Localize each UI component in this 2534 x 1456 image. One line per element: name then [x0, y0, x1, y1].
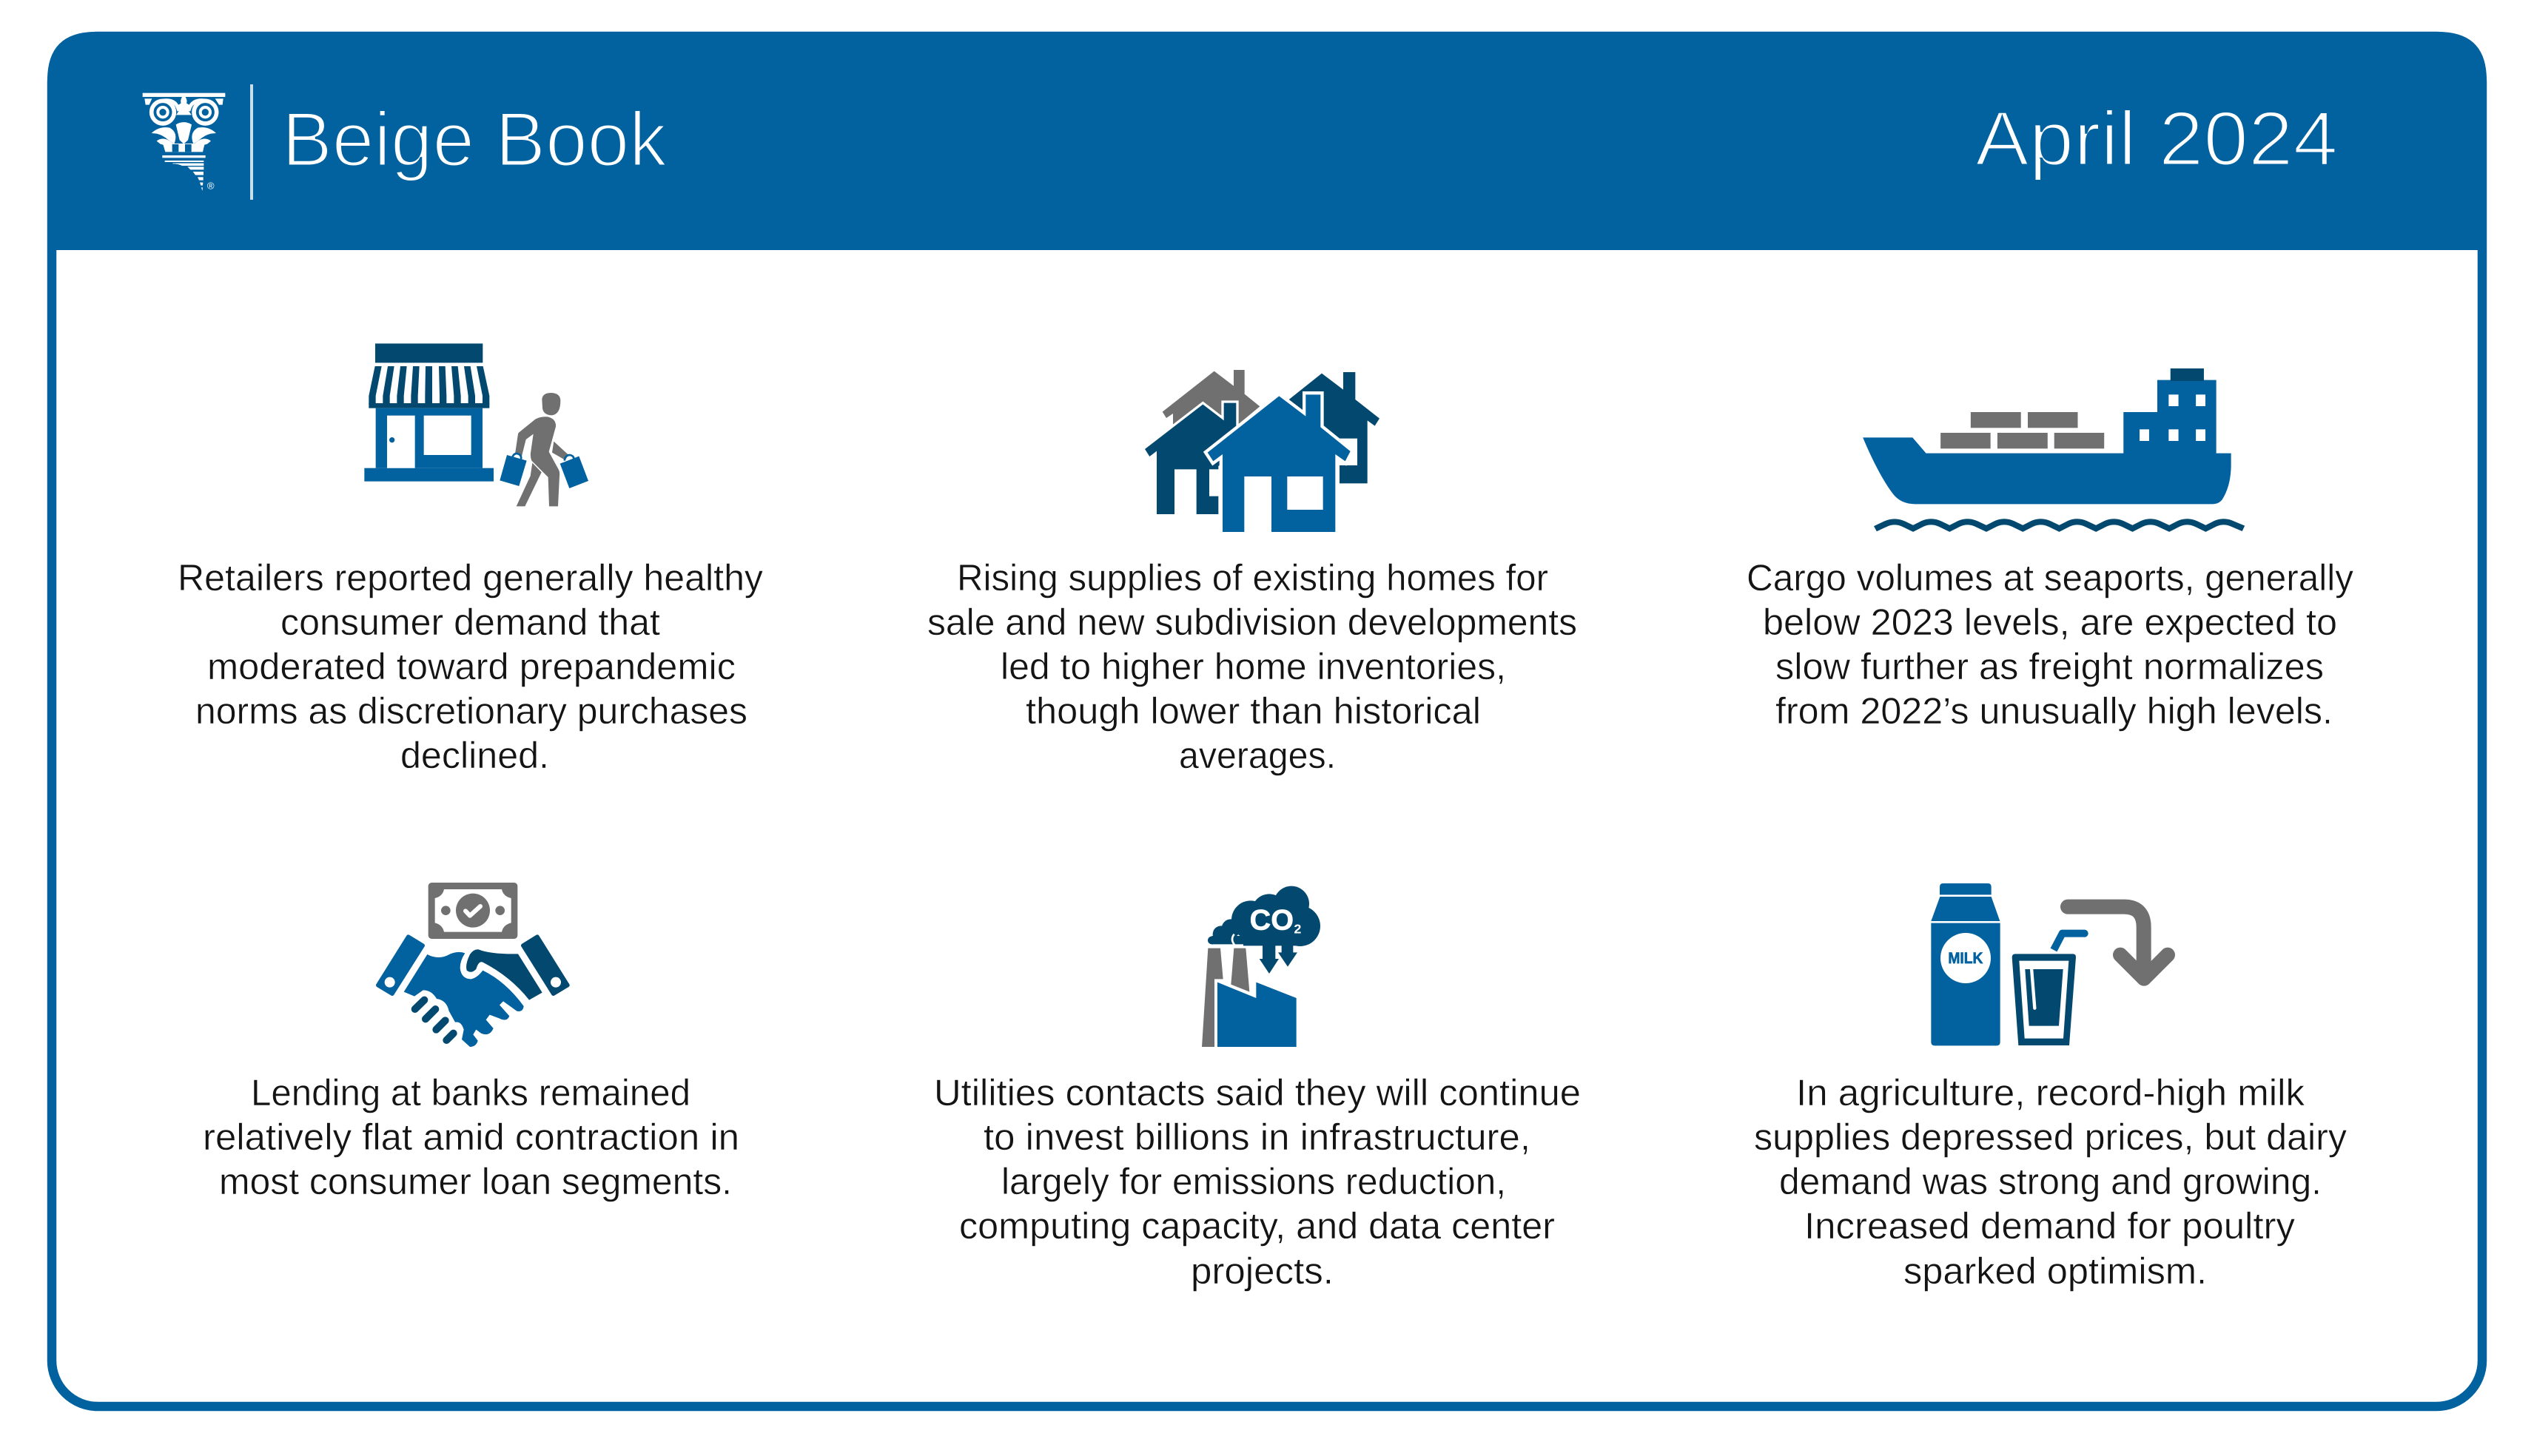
text: seaports: Cargo volumes at seaports, generally: [1747, 557, 2353, 599]
heading: date: April 2024: [1975, 96, 2338, 182]
text: housing: Rising supplies of existing homes for: [957, 557, 1548, 599]
text: housing: though lower than historical: [1026, 690, 1481, 732]
icon: factory and CO2 cloud: [1202, 886, 1320, 1047]
text: lending: Lending at banks remained: [251, 1072, 690, 1113]
text: seaports: below 2023 levels, are expected to: [1763, 601, 2337, 643]
text: housing: led to higher home inventories,: [1001, 646, 1506, 687]
text: seaports: from 2022’s unusually high levels.: [1775, 690, 2333, 732]
logo: column capital: [143, 93, 225, 191]
text: retail: [178, 557, 763, 776]
text: housing: sale and new subdivision developments: [927, 601, 1577, 643]
text: utilities: computing capacity, and data center: [959, 1205, 1555, 1247]
text: retail: Retailers reported generally healthy: [178, 557, 763, 599]
text: agriculture: supplies depressed prices, but dairy: [1754, 1116, 2347, 1158]
logo divider: [250, 84, 253, 200]
icon: storefront and shopper: [364, 343, 588, 506]
icon: milk carton, glass and down arrow: MILK: [1948, 949, 1983, 967]
text: housing: [927, 557, 1577, 776]
icon: container ship: [1863, 368, 2243, 529]
text: seaports: slow further as freight normalizes: [1775, 646, 2324, 687]
icon: milk carton, glass and down arrow: [1931, 883, 2168, 1045]
text: retail: declined.: [400, 735, 549, 776]
text: utilities: to invest billions in infrastructure,: [984, 1116, 1530, 1158]
text: lending: relatively flat amid contraction in: [203, 1116, 739, 1158]
text: lending: [203, 1072, 739, 1202]
text: utilities: [934, 1072, 1581, 1292]
text: retail: norms as discretionary purchases: [195, 690, 747, 732]
text: retail: moderated toward prepandemic: [207, 646, 736, 687]
icon: factory and CO2 cloud: CO: [1250, 904, 1294, 937]
text: agriculture: [1754, 1072, 2347, 1292]
text: housing: averages.: [1179, 735, 1336, 776]
text: retail: consumer demand that: [280, 601, 660, 643]
text: seaports: [1747, 557, 2353, 732]
heading: Beige Book: Beige Book: [282, 97, 668, 183]
text: agriculture: Increased demand for poultry: [1804, 1205, 2295, 1247]
text: agriculture: demand was strong and growing.: [1779, 1161, 2322, 1202]
text: lending: most consumer loan segments.: [219, 1161, 732, 1202]
header band: [47, 32, 2487, 250]
text: utilities: projects.: [1191, 1250, 1334, 1292]
text: agriculture: sparked optimism.: [1903, 1250, 2207, 1292]
icon: factory and CO2 cloud: 2: [1294, 921, 1301, 936]
icon: houses: [1145, 370, 1379, 532]
text: utilities: Utilities contacts said they will continue: [934, 1072, 1581, 1113]
logo: column capital: ®: [207, 180, 215, 191]
header background: [47, 32, 2487, 250]
text: agriculture: In agriculture, record-high milk: [1796, 1072, 2305, 1113]
icon: handshake and banknote: [378, 883, 568, 1047]
text: utilities: largely for emissions reduction,: [1001, 1161, 1506, 1202]
